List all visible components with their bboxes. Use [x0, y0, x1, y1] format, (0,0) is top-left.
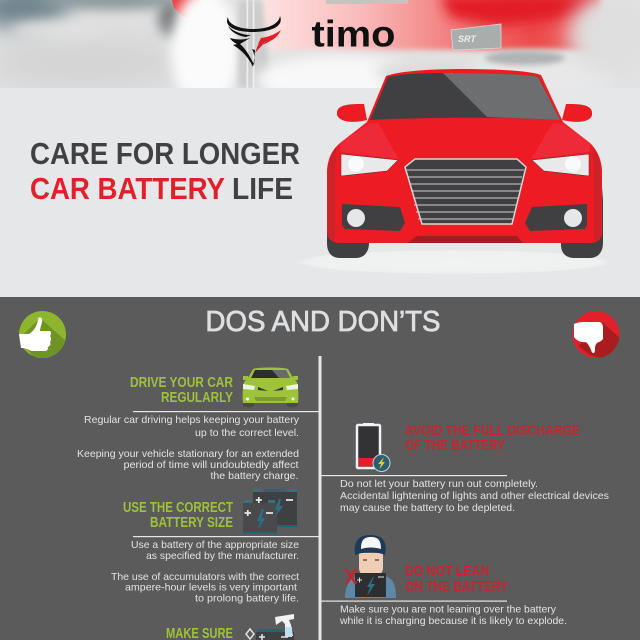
heading [130, 375, 233, 406]
body text: as specified by the manufacturer. [146, 551, 299, 562]
item: avoid the full discharge [320, 423, 609, 514]
body text: Accidental lightening of lights and other electrical devices [340, 491, 609, 502]
logo: bull mark [227, 16, 281, 67]
icon: green car [243, 368, 298, 407]
rule [320, 600, 507, 602]
body text: period of time will undoubtedly affect [124, 460, 299, 471]
rule [320, 475, 507, 476]
body text: Do not let your battery run out completely. [340, 479, 538, 490]
icon: low battery [357, 423, 390, 472]
body text [339, 604, 567, 627]
body text: the battery charge. [210, 471, 298, 482]
item: drive your car regularly [77, 368, 320, 482]
body text: Regular car driving helps keeping your battery [84, 415, 300, 426]
item: do not lean on the battery [320, 535, 567, 627]
rule [133, 411, 320, 412]
item: use the correct battery size [111, 489, 320, 604]
body text: The use of accumulators with the correct [111, 572, 299, 583]
heading: USE THE CORRECT [123, 500, 233, 516]
icon: spray bottle on battery [246, 614, 294, 640]
body text [77, 415, 300, 482]
body text [340, 479, 609, 514]
center divider [318, 356, 322, 640]
dark Dos and Don'ts panel [0, 297, 640, 640]
heading: DRIVE YOUR CAR [130, 375, 233, 391]
body text: Make sure you are not leaning over the battery [340, 604, 557, 616]
icon: person with battery [345, 535, 396, 598]
heading: ON THE BATTERY [405, 579, 508, 595]
title [30, 136, 300, 206]
icon: batteries [243, 489, 298, 534]
light hero panel [0, 88, 640, 297]
rule [133, 536, 320, 537]
heading: BATTERY SIZE [150, 515, 233, 531]
heading: AVOID THE FULL DISCHARGE [405, 423, 580, 439]
item: make sure [166, 614, 294, 640]
header smoke photo background [0, 0, 640, 88]
body text: Keeping your vehicle stationary for an extended [77, 449, 299, 460]
grille [405, 159, 526, 224]
heading: REGULARLY [161, 390, 233, 406]
body text: Use a battery of the appropriate size [131, 540, 299, 551]
body text: may cause the battery to be depleted. [340, 503, 515, 514]
heading [123, 500, 233, 531]
body text: up to the correct level. [195, 428, 299, 439]
heading: OF THE BATTERY [405, 438, 505, 454]
SRT badge: SRT [458, 34, 477, 44]
red car illustration [297, 69, 611, 274]
body text: to prolong battery life. [195, 594, 299, 604]
icon: thumbs up [19, 311, 67, 360]
SRT badge [451, 24, 501, 50]
title: CARE FOR LONGER [30, 136, 300, 171]
heading [405, 564, 508, 595]
body text: ampere-hour levels is very important [125, 582, 297, 594]
body text: while it is charging because it is likely to explode. [339, 616, 567, 627]
body text [111, 540, 299, 604]
title: LIFE [232, 171, 293, 206]
fog lamps [342, 204, 405, 231]
title: CAR BATTERY [30, 171, 225, 206]
section heading: DOS AND DON’TS [206, 306, 440, 338]
icon: thumbs down [572, 311, 622, 360]
heading [405, 423, 580, 454]
logo: timo wordmark: timo [312, 14, 396, 54]
heading: DO NOT LEAN [405, 564, 489, 580]
